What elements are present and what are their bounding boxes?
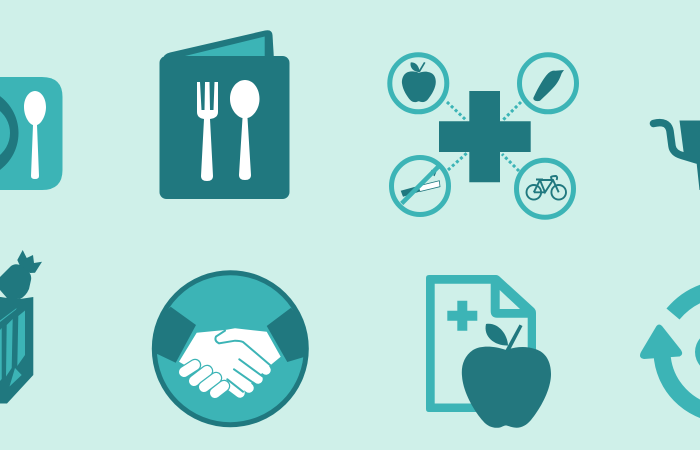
fork bbox=[197, 82, 218, 181]
apple leaf bbox=[486, 324, 508, 346]
left fingers bbox=[184, 365, 224, 393]
spoon bbox=[230, 80, 260, 180]
document outline and fold bbox=[426, 275, 536, 412]
carrot bbox=[0, 264, 31, 299]
body bbox=[680, 120, 700, 190]
center shape bbox=[695, 331, 700, 373]
plate ring bbox=[0, 87, 19, 179]
icon: medical document with apple bbox=[426, 275, 551, 428]
hands bbox=[179, 328, 281, 394]
apple bbox=[462, 347, 551, 428]
icon: handshake bbox=[153, 273, 307, 425]
front cover bbox=[160, 56, 290, 199]
top arc bbox=[673, 290, 700, 314]
icon: healthy lifestyle cross bbox=[390, 55, 576, 217]
circle: chili pepper bbox=[520, 55, 576, 112]
icon: recycling arrows bbox=[640, 290, 700, 414]
arrowhead bbox=[640, 324, 682, 359]
circle: no smoking bbox=[392, 158, 448, 214]
circle: apple bbox=[390, 55, 447, 112]
bag notch bbox=[0, 290, 7, 298]
outer circle bbox=[154, 273, 306, 425]
left cuff bbox=[153, 307, 196, 363]
medical plus bbox=[447, 301, 477, 331]
carrot leaves bbox=[17, 250, 42, 273]
finger separators and thumb bbox=[215, 331, 270, 392]
icon: watering can bbox=[654, 120, 700, 190]
back cover flap bbox=[164, 30, 274, 60]
spoon bbox=[24, 91, 46, 179]
apple stem bbox=[505, 324, 522, 352]
spout bbox=[654, 123, 697, 160]
icon: carrot in bag bbox=[0, 250, 42, 404]
dotted connectors bbox=[447, 102, 521, 171]
icon: menu with fork and spoon bbox=[160, 30, 290, 199]
icon: plate and spoon bbox=[0, 77, 62, 190]
circle: bicycle bbox=[516, 160, 574, 217]
bag body bbox=[0, 297, 33, 404]
medical cross bbox=[439, 91, 531, 182]
plate tile bbox=[0, 77, 62, 190]
right fingers bbox=[228, 358, 266, 393]
bag facets bbox=[0, 308, 25, 386]
flap inner page bbox=[185, 36, 265, 56]
right cuff bbox=[267, 308, 307, 362]
bottom arc with arrow shaft bbox=[662, 354, 700, 414]
